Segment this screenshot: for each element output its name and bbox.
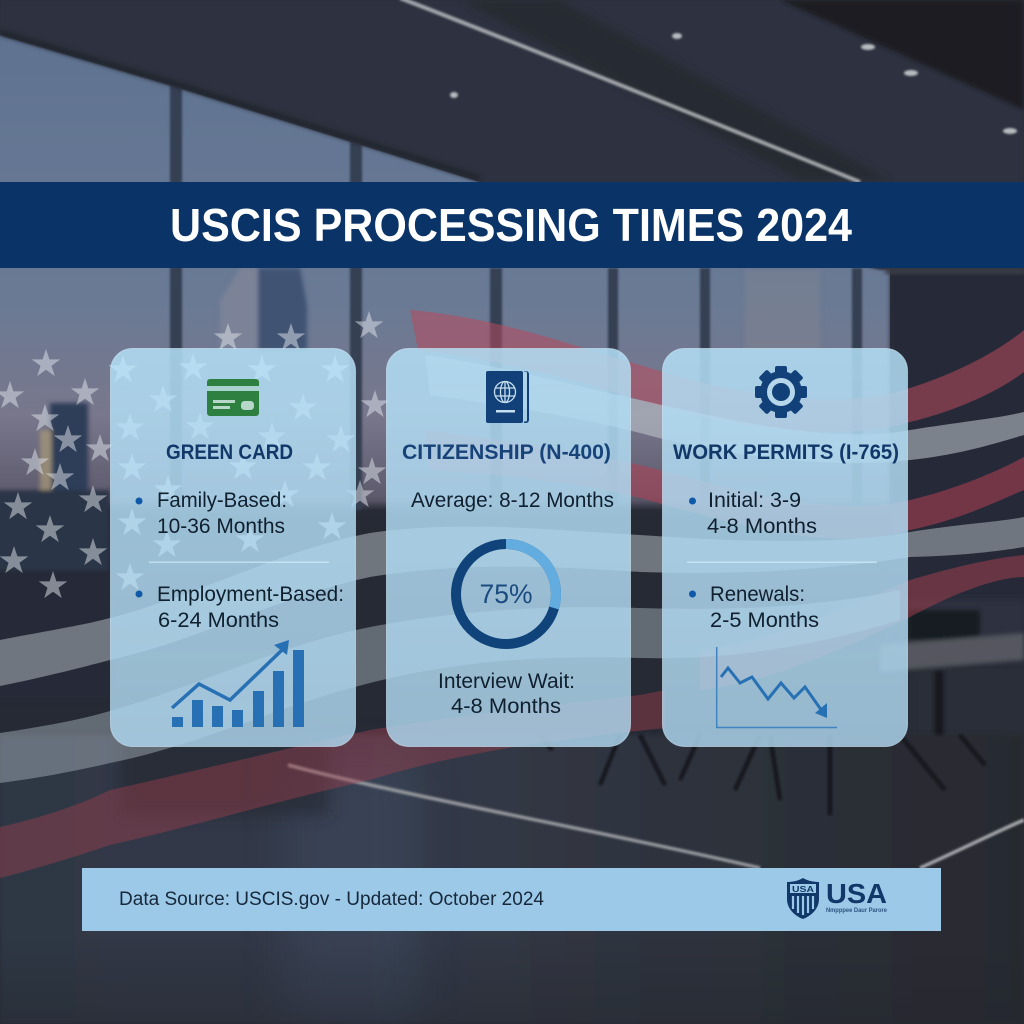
- bullet: initial: 4-8 Months: [707, 515, 817, 538]
- donut chart: 75%: [456, 544, 556, 644]
- logo: USA shield: Nmpppee Daur Parore: [826, 907, 887, 914]
- right wall: [890, 268, 1024, 648]
- bullet: renewals: [689, 583, 819, 632]
- ceiling: [0, 0, 1024, 270]
- footer bar: [82, 868, 941, 931]
- logo: USA shield: USA: [826, 878, 887, 909]
- interview wait: 4-8 Months: [451, 695, 561, 718]
- heading: GREEN CARD: [166, 441, 293, 464]
- bullet: family-based: Family-Based:: [157, 489, 287, 512]
- interview wait: Interview Wait:: [438, 670, 575, 693]
- interview wait: [438, 670, 575, 718]
- bullet: initial: Initial: 3-9: [708, 489, 801, 512]
- mullions: [170, 85, 862, 510]
- bullet: employment-based: 6-24 Months: [158, 609, 279, 632]
- icon: green card: [207, 379, 259, 416]
- panel: citizenship: [386, 348, 630, 746]
- bullet: family-based: 10-36 Months: [157, 515, 285, 538]
- heading: WORK PERMITS (I-765): [673, 441, 899, 464]
- skyline: [0, 268, 820, 700]
- title: USCIS PROCESSING TIMES 2024: [170, 199, 852, 251]
- bullet: family-based: [136, 489, 287, 538]
- bullet: renewals: 2-5 Months: [710, 609, 819, 632]
- flag: stripes: [0, 310, 1024, 878]
- icon: passport: [486, 371, 529, 423]
- donut chart: 75%: 75%: [480, 579, 532, 609]
- data source: Data Source: USCIS.gov - Updated: October 2024: [119, 889, 544, 910]
- title banner: [0, 182, 1024, 268]
- heading: CITIZENSHIP (N-400): [402, 441, 611, 464]
- floor: [0, 735, 1024, 1024]
- bullet: employment-based: [136, 583, 344, 632]
- average: Average: 8-12 Months: [411, 489, 614, 512]
- panel: work permits: [662, 348, 908, 746]
- flag: stars: [0, 311, 389, 598]
- bullet: employment-based: Employment-Based:: [157, 583, 344, 606]
- bar chart: rising: [172, 640, 304, 727]
- icon: gear: [755, 366, 807, 418]
- logo: USA shield: USA: [792, 884, 814, 894]
- windows: [0, 35, 1024, 510]
- panel: green card: [110, 348, 356, 746]
- logo: USA shield: [787, 878, 887, 919]
- bullet: renewals: Renewals:: [710, 583, 805, 606]
- table and chairs: [880, 610, 1024, 740]
- cards' under-stars: [109, 353, 355, 590]
- bullet: initial: [689, 489, 817, 538]
- line chart: falling: [717, 647, 837, 728]
